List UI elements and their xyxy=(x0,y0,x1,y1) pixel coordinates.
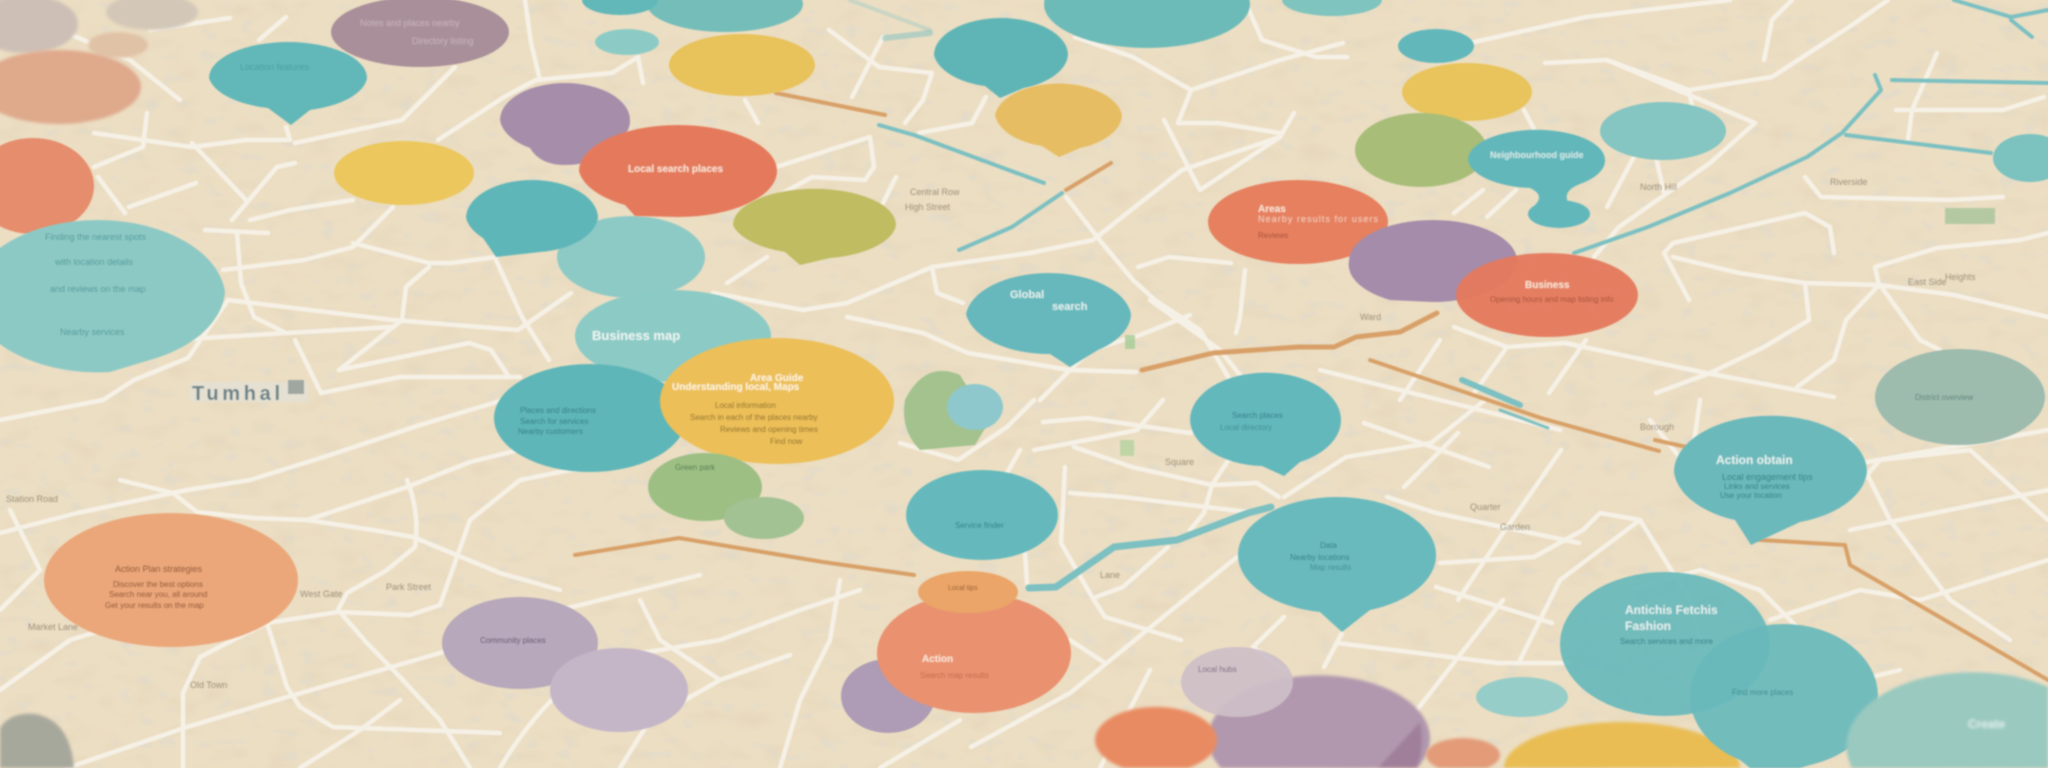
bubble: coral centre: Local search places xyxy=(628,164,723,175)
bubble: mauve lower xyxy=(841,659,935,733)
bubble: teal large centre-left: Places and directions xyxy=(520,406,596,415)
bubble: teal overlapping front: Search services and more xyxy=(1620,637,1713,646)
bubble: orange large left xyxy=(44,513,298,647)
bubble: teal overlapping front xyxy=(1560,572,1770,716)
bubble: teal with tail, upper left xyxy=(209,42,367,125)
map label: place name xyxy=(190,380,308,405)
bubble: teal with tail top centre xyxy=(934,18,1068,98)
bubble: salmon right centre xyxy=(1208,180,1388,264)
bubble: salmon left xyxy=(0,138,94,234)
bubble: orange large left: Get your results on the map xyxy=(105,601,204,610)
bubble: green lower: Green park xyxy=(675,463,716,472)
bubble: orange large left: Action Plan strategies xyxy=(115,564,203,574)
bubble: pale teal behind yellow: Business map xyxy=(592,328,680,343)
bubble: teal centre with tail xyxy=(966,273,1131,367)
bubble: coral overlapping: Business xyxy=(1525,280,1570,291)
bubble: teal large top xyxy=(1044,0,1250,48)
bubble: coral centre xyxy=(579,125,777,217)
small map labels: Central Row xyxy=(910,187,960,197)
bubble: yellow large centre: Local information xyxy=(715,401,776,410)
bubble: pale teal right xyxy=(1600,102,1726,160)
bubble: purple grey lower xyxy=(442,597,598,689)
bubble: orange lower centre: Action xyxy=(922,654,953,665)
bubble: yellow large centre: Find now xyxy=(770,437,803,446)
bubble: small pale teal xyxy=(947,384,1003,430)
bubble: salmon right centre: Nearby results for users xyxy=(1258,214,1378,224)
bubble: small teal top xyxy=(595,29,659,55)
bubble: large pale teal left: Nearby services xyxy=(60,327,125,337)
bubble: teal with tail, left centre xyxy=(466,180,598,257)
bubble: lilac lower xyxy=(1181,647,1293,717)
bubble: teal right with title: Links and services xyxy=(1724,482,1790,491)
small map labels: Square xyxy=(1165,457,1194,467)
bubble: olive xyxy=(733,189,896,265)
bubble: salmon right centre: Reviews xyxy=(1258,231,1288,240)
bubble: purple large bottom xyxy=(1208,675,1430,768)
bubble: amber with tail xyxy=(995,83,1122,157)
bubble: teal lower with tail: Data xyxy=(1320,541,1337,550)
bubble: teal stacked right xyxy=(1468,130,1605,228)
bubble: salmon bottom xyxy=(1426,738,1500,768)
bubble: orange small tag: Local tips xyxy=(948,585,978,592)
bubble: yellow top xyxy=(669,34,815,96)
bubble: teal large centre-left xyxy=(494,364,686,472)
bubble: yellow bottom xyxy=(1504,722,1740,768)
bubble: teal centre with tail: search xyxy=(1052,301,1088,313)
bubble: purple right centre xyxy=(1349,220,1517,302)
bubble: green small xyxy=(724,497,804,539)
bubble: teal lower with tail: Map results xyxy=(1310,563,1351,572)
rivers and canals xyxy=(850,0,2048,588)
bubble: teal centre right with tail: Local directory xyxy=(1220,423,1272,432)
bubble: coral overlapping: Opening hours and map listing info xyxy=(1490,295,1614,304)
bubble: large pale teal left xyxy=(0,220,225,372)
bubble: teal overlapping rear xyxy=(1690,624,1878,768)
bubble: large pale teal left: with location details xyxy=(54,257,134,267)
text on rear teal bubble: Find more places xyxy=(1732,688,1793,697)
bubble: grey-green circle right xyxy=(1875,349,2045,445)
bubble: yellow large centre: Area Guide xyxy=(750,373,804,384)
bubble: orange lower centre xyxy=(877,593,1071,713)
bubble: large pale teal left: Finding the nearest spots xyxy=(45,232,147,242)
bubble: teal centre with tail: Global xyxy=(1010,289,1044,301)
small map labels: Garden xyxy=(1500,522,1530,532)
small map labels: Station Road xyxy=(6,494,58,504)
bubble: teal overlapping front: Antichis Fetchis xyxy=(1625,603,1718,617)
bubble: lilac lower: Local hubs xyxy=(1198,665,1237,674)
bubble: green right xyxy=(1355,113,1487,187)
bubble: green lower xyxy=(648,453,762,521)
bubble: yellow large centre: Reviews and opening times xyxy=(720,425,818,434)
bubble: teal lower centre xyxy=(906,470,1058,560)
bubble: grey-green circle right: District overview xyxy=(1915,393,1973,402)
small map labels: North Hill xyxy=(1640,182,1677,192)
map park patches xyxy=(1120,208,1995,456)
bubble: teal lower centre: Service finder xyxy=(955,521,1004,530)
small map labels: East Side xyxy=(1908,277,1947,287)
bubble: grey pink top left xyxy=(0,0,78,53)
bubble: pale teal small xyxy=(1476,677,1568,717)
bubble: purple with tail xyxy=(500,83,630,165)
bubble: mauve top xyxy=(331,0,509,67)
bubble: mauve top: Directory listing xyxy=(412,36,474,46)
small map labels: High Street xyxy=(905,202,951,212)
bubble: yellow top right xyxy=(1402,63,1532,121)
bubble: teal large centre-left: Search for services xyxy=(520,417,588,426)
bubble: grey top xyxy=(106,0,198,30)
bubble: pale teal behind yellow xyxy=(575,290,771,382)
bubble: teal overlapping front: Fashion xyxy=(1625,619,1671,633)
bubble: orange bottom xyxy=(1095,707,1217,768)
small map labels: Borough xyxy=(1640,422,1674,432)
small map labels: Old Town xyxy=(190,680,227,690)
bubble: orange large left: Search near you, all around xyxy=(109,590,207,599)
bubble: green park area xyxy=(904,371,990,450)
small map labels: West Gate xyxy=(300,589,342,599)
bubble: coral overlapping xyxy=(1456,253,1638,337)
bubble: teal centre right with tail xyxy=(1190,373,1341,476)
bubble: teal right with title xyxy=(1674,416,1867,545)
bubble: pale teal bottom right: Create xyxy=(1968,717,2006,731)
bubble: teal lower with tail: Nearby locations xyxy=(1290,553,1350,562)
bubble: teal right edge xyxy=(1993,134,2048,182)
small map labels: Quarter xyxy=(1470,502,1501,512)
bubble: orange small tag xyxy=(918,571,1018,613)
small map labels: Lane xyxy=(1100,570,1120,580)
bubble: yellow left centre xyxy=(334,141,474,205)
bubble: teal top right xyxy=(1282,0,1382,16)
small map labels: Riverside xyxy=(1830,177,1868,187)
bubble: teal lower with tail xyxy=(1238,497,1436,632)
bubble: purple grey lower: Community places xyxy=(480,636,546,645)
map label: place name: Tumhal xyxy=(192,383,280,405)
bubble: yellow large centre: Search in each of the places nearby xyxy=(690,413,818,422)
bubble: teal right with title: Local engagement tips xyxy=(1722,472,1813,482)
bubble: teal with tail, upper left: Location features xyxy=(240,62,310,72)
small map labels: Market Lane xyxy=(28,622,78,632)
small map labels: Ward xyxy=(1360,312,1381,322)
bubble: yellow large centre xyxy=(660,338,894,464)
bubble: salmon right centre: Areas xyxy=(1258,204,1286,215)
bubble: orange large left: Discover the best options xyxy=(113,580,203,589)
bubble: teal large centre-left: Nearby customers xyxy=(518,427,583,436)
bubble: pale teal bottom right xyxy=(1846,672,2048,768)
bubble: teal stacked right: Neighbourhood guide xyxy=(1490,150,1584,160)
small map labels: Heights xyxy=(1945,272,1976,282)
transit routes xyxy=(575,93,2048,680)
bubble: teal right with title: Use your location xyxy=(1720,491,1782,500)
bubble: grey bottom left xyxy=(0,714,74,768)
small map labels xyxy=(6,177,1976,690)
bubble: orange lower centre: Search map results xyxy=(920,671,989,680)
small map labels: Park Street xyxy=(386,582,432,592)
bubble: peach top left xyxy=(0,50,141,124)
bubble: teal top centre xyxy=(582,0,803,32)
bubble: teal centre right with tail: Search places xyxy=(1232,411,1283,420)
bubble: large pale teal left: and reviews on the map xyxy=(50,284,146,294)
bubble: pale teal centre xyxy=(557,216,705,298)
bubble: teal right with title: Action obtain xyxy=(1716,453,1793,467)
bubble: mauve top: Notes and places nearby xyxy=(360,18,460,28)
bubble: lavender lower xyxy=(550,648,688,732)
bubble: pale tan top left xyxy=(88,32,148,58)
bubble: yellow large centre: Understanding local, Maps xyxy=(672,382,800,393)
bubble: small teal tag xyxy=(1398,29,1474,63)
